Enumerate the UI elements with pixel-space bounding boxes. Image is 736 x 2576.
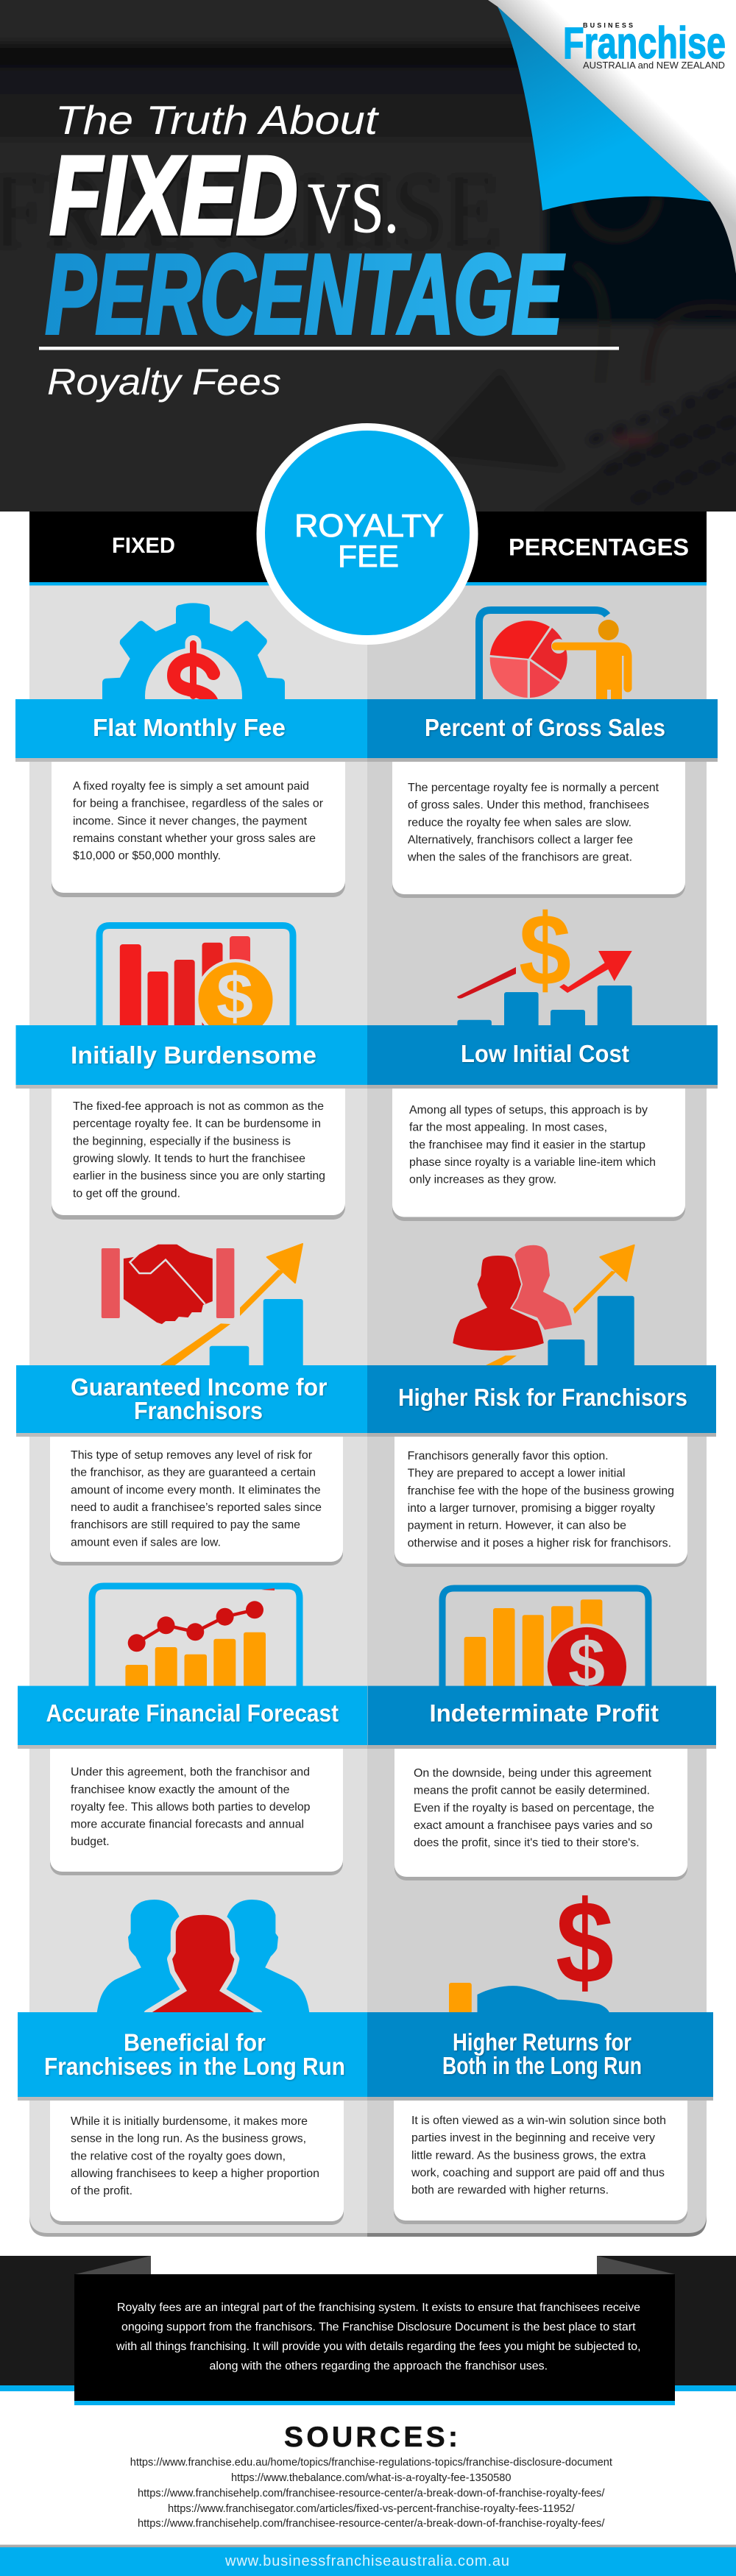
text card: only increases as they grow. bbox=[409, 1174, 556, 1186]
text card: far the most appealing. In most cases, bbox=[409, 1122, 607, 1134]
sources heading: SOURCES: bbox=[284, 2421, 458, 2453]
text card bbox=[50, 1398, 343, 1565]
conclusion text: Royalty fees are an integral part of the franchising system. It exists to ensure that franchisees receive bbox=[117, 2301, 640, 2314]
text card: Franchisors generally favor this option. bbox=[408, 1450, 609, 1462]
text card: Among all types of setups, this approach is by bbox=[409, 1104, 648, 1117]
central circle: Royalty Fee: ROYALTY bbox=[294, 508, 444, 544]
sources list: https://www.franchisegator.com/articles/fixed-vs-percent-franchise-royalty-fees-11952/ bbox=[168, 2502, 575, 2515]
row 2 right: Low Initial Cost bbox=[367, 894, 718, 1221]
text card: more accurate financial forecasts and annual bbox=[71, 1819, 304, 1831]
icon: people with arrow and bars bbox=[453, 1245, 634, 1370]
sources list: https://www.franchisehelp.com/franchisee-resource-center/a-break-down-of-franchise-royalty-fees/ bbox=[138, 2517, 605, 2530]
conclusion text: ongoing support from the franchisors. The Franchise Disclosure Document is the best place to start bbox=[121, 2321, 636, 2334]
column heading: FIXED: FIXED bbox=[112, 534, 175, 558]
header: dark photo banner bbox=[0, 0, 736, 530]
heading band bbox=[367, 1365, 716, 1437]
heading band bbox=[367, 699, 718, 762]
text card: payment in return. However, it can also be bbox=[408, 1520, 626, 1532]
heading band bbox=[367, 1025, 718, 1089]
column heading: PERCENTAGES: PERCENTAGES bbox=[509, 534, 689, 561]
text card: While it is initially burdensome, it makes more bbox=[71, 2115, 308, 2128]
title: FIXED: FIXED bbox=[52, 135, 299, 259]
blurred photo background bbox=[0, 0, 736, 530]
text card: does the profit, since it's tied to their store's. bbox=[414, 1837, 640, 1850]
text card: otherwise and it poses a higher risk for franchisors. bbox=[408, 1537, 671, 1549]
row 4 right: Indeterminate Profit bbox=[367, 1588, 716, 1880]
text card bbox=[50, 1722, 343, 1875]
text card: franchisors are still required to pay the same bbox=[71, 1519, 300, 1532]
column header band bbox=[29, 512, 707, 586]
text card: amount of income every month. It eliminates the bbox=[71, 1484, 321, 1496]
comparison panel background bbox=[29, 585, 707, 2237]
heading band: Guaranteed Income for bbox=[71, 1373, 328, 1401]
text card: On the downside, being under this agreement bbox=[414, 1767, 652, 1780]
icon: dollar with rising arrow and bars bbox=[457, 894, 632, 1029]
text card bbox=[394, 1398, 687, 1567]
heading band bbox=[16, 1365, 367, 1437]
heading band: Low Initial Cost bbox=[461, 1040, 629, 1067]
conclusion text bbox=[116, 2301, 641, 2373]
heading band: Flat Monthly Fee bbox=[93, 714, 286, 741]
conclusion text: along with the others regarding the approach the franchisor uses. bbox=[209, 2360, 548, 2373]
icon: bar chart with coin: $ bbox=[216, 960, 253, 1033]
footer band: www.businessfranchiseaustralia.com.au bbox=[224, 2553, 509, 2569]
icon: three people bbox=[97, 1900, 309, 2014]
text card: need to audit a franchisee’s reported sales since bbox=[71, 1501, 322, 1514]
heading band bbox=[367, 1686, 716, 1749]
icon: bars with dollar coin on screen bbox=[442, 1588, 648, 1709]
central circle: Royalty Fee bbox=[256, 423, 478, 645]
text card: for being a franchisee, regardless of the sales or bbox=[73, 798, 324, 810]
text card: This type of setup removes any level of risk for bbox=[71, 1449, 313, 1462]
text card: franchisee know exactly the amount of the bbox=[71, 1783, 290, 1796]
text card: A fixed royalty fee is simply a set amount paid bbox=[73, 780, 309, 793]
icon: gear with dollar bbox=[102, 603, 285, 745]
text card: Even if the royalty is based on percentage, the bbox=[414, 1802, 654, 1814]
icon: presenter with pie chart bbox=[479, 610, 631, 701]
heading band: Higher Returns for bbox=[453, 2028, 631, 2056]
text card: the relative cost of the royalty goes down, bbox=[71, 2150, 286, 2162]
text card: work, coaching and support are paid off and thus bbox=[411, 2167, 665, 2179]
conclusion text: with all things franchising. It will provide you with details regarding the fees you might be subjected to, bbox=[116, 2340, 641, 2353]
text card: It is often viewed as a win-win solution since both bbox=[411, 2115, 666, 2127]
text card: into a larger turnover, promising a bigger royalty bbox=[408, 1502, 655, 1515]
heading band bbox=[367, 2012, 713, 2101]
sources list: https://www.franchise.edu.au/home/topics/franchise-regulations-topics/franchise-disclosure-document bbox=[130, 2456, 613, 2469]
text card bbox=[50, 2061, 344, 2225]
footer band bbox=[0, 2545, 736, 2576]
heading band: Both in the Long Run bbox=[442, 2052, 642, 2079]
text card: parties invest in the beginning and receive very bbox=[411, 2132, 655, 2145]
sources list bbox=[130, 2456, 613, 2530]
heading band: Initially Burdensome bbox=[71, 1041, 316, 1069]
text card: income. Since it never changes, the payment bbox=[73, 815, 308, 827]
text card: of the profit. bbox=[71, 2185, 132, 2198]
text card bbox=[52, 1060, 345, 1220]
text card: Alternatively, franchisors collect a larger fee bbox=[408, 834, 633, 846]
text card: percentage royalty fee. It can be burdensome in bbox=[73, 1118, 321, 1130]
icon: bar chart with coin bbox=[99, 926, 293, 1040]
text card: earlier in the business since you are only starting bbox=[73, 1170, 325, 1183]
text card: amount even if sales are low. bbox=[71, 1536, 221, 1549]
row 3 right: Higher Risk for Franchisors bbox=[367, 1245, 716, 1567]
heading band bbox=[18, 2012, 367, 2101]
text card: growing slowly. It tends to hurt the franchisee bbox=[73, 1153, 305, 1165]
text card: of gross sales. Under this method, franchisees bbox=[408, 799, 649, 812]
heading band: Indeterminate Profit bbox=[430, 1699, 659, 1727]
row 5 right: Higher Returns for Both in the Long Run bbox=[367, 1876, 713, 2224]
title: FIXED: FIXED bbox=[50, 133, 297, 257]
icon: bars with dollar coin on screen: $ bbox=[568, 1624, 605, 1701]
text card: budget. bbox=[71, 1836, 110, 1848]
subtitle: Royalty Fees: Royalty Fees bbox=[47, 361, 281, 403]
row 2 left: Initially Burdensome bbox=[16, 926, 367, 1220]
row 5 left: Beneficial for Franchisees in the Long Run bbox=[18, 1900, 367, 2225]
text card: to get off the ground. bbox=[73, 1187, 180, 1200]
row 4 left: Accurate Financial Forecast bbox=[18, 1586, 367, 1875]
text card bbox=[392, 736, 685, 898]
text card: when the sales of the franchisors are great. bbox=[407, 852, 632, 864]
text card bbox=[52, 736, 345, 897]
text card: both are rewarded with higher returns. bbox=[411, 2184, 609, 2197]
text card: sense in the long run. As the business grows, bbox=[71, 2133, 306, 2145]
heading band: Higher Risk for Franchisors bbox=[398, 1384, 687, 1411]
text card bbox=[394, 2061, 687, 2224]
text card: allowing franchisees to keep a higher proportion bbox=[71, 2168, 319, 2180]
heading band: Beneficial for bbox=[124, 2029, 266, 2056]
title: The Truth About: The Truth About bbox=[55, 97, 380, 143]
text card: little reward. As the business grows, the extra bbox=[411, 2149, 646, 2162]
text card: exact amount a franchisee pays varies and so bbox=[414, 1819, 653, 1832]
text card: franchise fee with the hope of the business growing bbox=[408, 1485, 674, 1497]
logo: Business Franchise: AUSTRALIA and NEW ZEALAND bbox=[583, 60, 725, 71]
title underline bbox=[39, 347, 619, 350]
sources list: https://www.franchisehelp.com/franchisee-resource-center/a-break-down-of-franchise-royalty-fees/ bbox=[138, 2487, 605, 2499]
blurred photo background: FRANCHISE bbox=[0, 152, 500, 270]
icon: dollar, bar and hand bbox=[449, 1876, 614, 2014]
text card: royalty fee. This allows both parties to develop bbox=[71, 1801, 311, 1814]
text card: Under this agreement, both the franchisor and bbox=[71, 1766, 310, 1779]
icon: line and bar chart on screen bbox=[92, 1586, 300, 1688]
text card: $10,000 or $50,000 monthly. bbox=[73, 850, 221, 863]
text card: phase since royalty is a variable line-item which bbox=[409, 1156, 656, 1169]
text card: The fixed-fee approach is not as common as the bbox=[73, 1100, 324, 1113]
page curl: blue flap bbox=[498, 7, 710, 210]
text card: the franchisee may find it easier in the startup bbox=[409, 1139, 645, 1151]
logo: Business Franchise: BUSINESS bbox=[583, 22, 633, 29]
text card bbox=[392, 1060, 685, 1221]
text card: the franchisor, as they are guaranteed a certain bbox=[71, 1467, 316, 1479]
conclusion ribbon bbox=[0, 2256, 736, 2405]
text card: remains constant whether your gross sales are bbox=[73, 832, 316, 845]
text card: the beginning, especially if the business is bbox=[73, 1135, 291, 1147]
heading band: Franchisors bbox=[134, 1397, 263, 1424]
row 3 left: Guaranteed Income for Franchisors bbox=[16, 1244, 367, 1565]
text card: They are prepared to accept a lower initial bbox=[408, 1468, 626, 1480]
heading band: Percent of Gross Sales bbox=[425, 714, 665, 741]
row 1 right: Percent of Gross Sales bbox=[367, 610, 718, 898]
heading band bbox=[16, 1025, 367, 1089]
text card: reduce the royalty fee when sales are slow. bbox=[408, 816, 631, 829]
heading band: Accurate Financial Forecast bbox=[46, 1699, 339, 1727]
row 1 left: Flat Monthly Fee bbox=[15, 603, 367, 897]
text card: The percentage royalty fee is normally a percent bbox=[408, 782, 659, 794]
icon: dollar, bar and hand: $ bbox=[556, 1876, 614, 2008]
heading band bbox=[15, 699, 367, 762]
page curl: white corner with soft fold shadow bbox=[488, 0, 736, 274]
heading band: Franchisees in the Long Run bbox=[44, 2053, 345, 2080]
central circle: Royalty Fee: FEE bbox=[338, 539, 399, 573]
text card: means the profit cannot be easily determined. bbox=[414, 1785, 650, 1797]
sources list: https://www.thebalance.com/what-is-a-royalty-fee-1350580 bbox=[231, 2471, 511, 2484]
heading band bbox=[18, 1686, 367, 1749]
text card bbox=[394, 1722, 687, 1880]
icon: dollar with rising arrow and bars: $ bbox=[519, 894, 571, 1007]
title: VS: VS. bbox=[308, 169, 399, 248]
icon: handshake with arrow and bars bbox=[102, 1244, 303, 1369]
